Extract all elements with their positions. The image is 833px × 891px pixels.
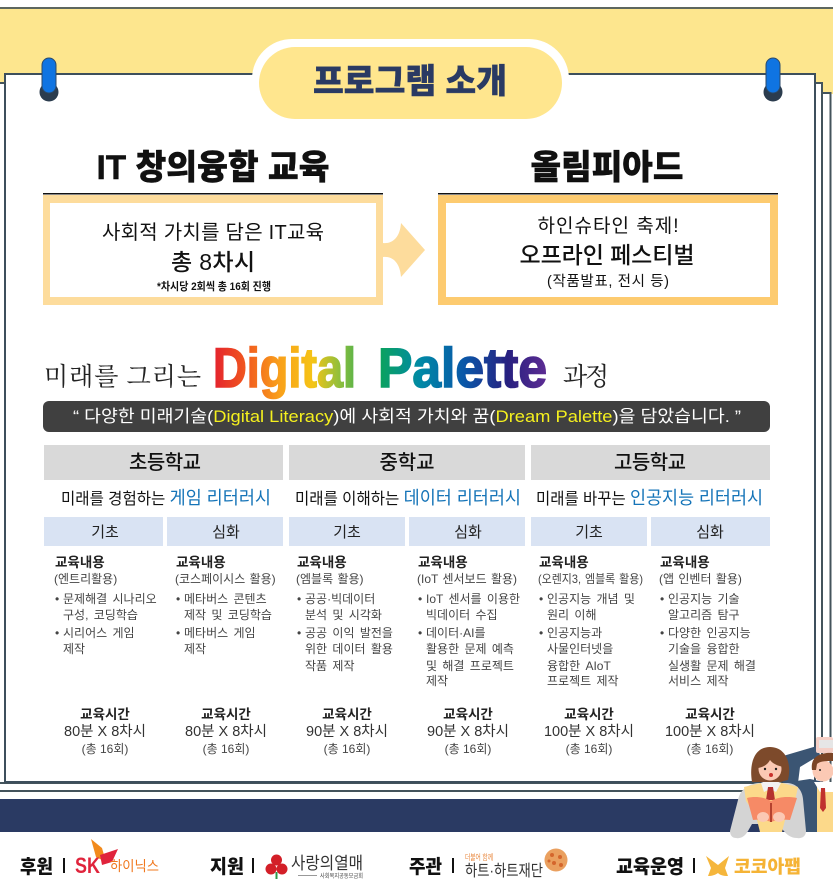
organizer: Heart-Heart Foundation: 더불어 함께 bbox=[465, 852, 493, 862]
subtitle: data literacy: 미래를 이해하는 데이터 리터러시 bbox=[295, 488, 521, 508]
heading: Digital Palette course: Digital bbox=[213, 336, 356, 399]
subtitle: game literacy: 미래를 경험하는 게임 리터러시 bbox=[61, 488, 271, 508]
column: middle advanced: IoT 센서를 이용한 bbox=[426, 592, 520, 606]
column: middle basic: 공공·빅데이터 bbox=[305, 592, 375, 606]
column: middle basic bbox=[296, 555, 393, 756]
column: middle advanced: 90분 X 8차시 bbox=[427, 723, 509, 740]
column: middle advanced: 교육내용 bbox=[418, 555, 468, 570]
title pill: 프로그램 소개 bbox=[313, 63, 507, 101]
panel: elementary school header bbox=[44, 445, 283, 480]
column: middle basic: 90분 X 8차시 bbox=[306, 723, 388, 740]
column: high basic bbox=[538, 555, 643, 756]
column: high basic: (총 16회) bbox=[566, 742, 612, 756]
panel: olympiad box: 하인슈타인 축제! bbox=[538, 215, 678, 237]
column: elementary basic: 교육내용 bbox=[55, 555, 105, 570]
column: high basic: (오렌지3, 엠블록 활용) bbox=[538, 572, 643, 586]
sponsor: SK hynix: 후원 bbox=[20, 856, 53, 878]
panel: elementary school header: 초등학교 bbox=[129, 451, 201, 474]
supporter: Community Chest: 지원 bbox=[210, 856, 244, 878]
column: high advanced: 서비스 제작 bbox=[668, 674, 729, 688]
panel: middle school header: 중학교 bbox=[380, 451, 434, 474]
column: high basic: 교육시간 bbox=[564, 707, 614, 722]
level tabs: 심화 bbox=[696, 524, 724, 541]
column: elementary advanced: 교육시간 bbox=[201, 707, 251, 722]
column: high basic: 원리 이해 bbox=[547, 608, 596, 622]
column: elementary basic: 제작 bbox=[63, 642, 85, 656]
operator: Kocoafab: 교육운영 bbox=[616, 856, 684, 878]
heading: olympiad: 올림피아드 bbox=[530, 149, 684, 187]
column: middle basic: • bbox=[297, 626, 301, 640]
column: high basic: • bbox=[539, 592, 543, 606]
column: elementary advanced: • bbox=[176, 626, 180, 640]
column: high advanced: 알고리즘 탐구 bbox=[668, 608, 740, 622]
column: elementary advanced bbox=[175, 555, 276, 756]
sponsor: SK hynix bbox=[20, 839, 159, 878]
column: high basic: 인공지능 개념 및 bbox=[547, 592, 635, 606]
column: middle basic: (엠블록 활용) bbox=[296, 572, 364, 586]
column: middle advanced: 교육시간 bbox=[443, 707, 493, 722]
slogan bar bbox=[43, 401, 770, 432]
panel: IT education box: 사회적 가치를 담은 IT교육 bbox=[102, 221, 324, 244]
column: high advanced bbox=[659, 555, 756, 756]
icon: students illustration bbox=[730, 737, 833, 838]
organizer: Heart-Heart Foundation bbox=[409, 848, 568, 880]
column: high advanced: • bbox=[660, 626, 664, 640]
column: middle basic: 위한 데이터 활용 bbox=[305, 642, 393, 656]
column: middle basic: 분석 및 시각화 bbox=[305, 608, 382, 622]
column: elementary basic: (엔트리활용) bbox=[54, 572, 117, 586]
column: elementary basic: • bbox=[55, 592, 59, 606]
panel: IT education box: *차시당 2회씩 총 16회 진행 bbox=[157, 279, 271, 293]
column: elementary advanced: 교육내용 bbox=[176, 555, 226, 570]
slogan bar: “ 다양한 미래기술( Digital Literacy )에 사회적 가치와 꿈( Dream Palette )을 담았습니다. ” bbox=[73, 407, 741, 426]
subtitle: AI literacy: 미래를 바꾸는 인공지능 리터러시 bbox=[536, 488, 763, 508]
column: high basic: 100분 X 8차시 bbox=[544, 723, 634, 740]
panel: high school header: 고등학교 bbox=[614, 451, 686, 474]
column: middle advanced: • bbox=[418, 592, 422, 606]
column: high advanced: 교육시간 bbox=[685, 707, 735, 722]
organizer: Heart-Heart Foundation: 주관 bbox=[409, 856, 442, 878]
column: high basic: 인공지능과 bbox=[547, 626, 602, 640]
column: middle advanced: (IoT 센서보드 활용) bbox=[417, 572, 517, 586]
column: middle advanced bbox=[417, 555, 520, 756]
yellow header background bbox=[0, 0, 833, 94]
column: elementary basic: 80분 X 8차시 bbox=[64, 723, 146, 740]
column: middle advanced: (총 16회) bbox=[445, 742, 491, 756]
column: middle basic: • bbox=[297, 592, 301, 606]
operator: Kocoafab: 코코아팹 bbox=[734, 857, 801, 877]
column: middle advanced: 활용한 문제 예측 bbox=[426, 642, 514, 656]
column: elementary basic: 시리어스 게임 bbox=[63, 626, 135, 640]
column: elementary advanced: • bbox=[176, 592, 180, 606]
column: high basic: 융합한 AIoT bbox=[547, 659, 611, 673]
column: high basic: 프로젝트 제작 bbox=[547, 674, 619, 688]
panel: olympiad box: 오프라인 페스티벌 bbox=[520, 242, 694, 268]
column: high advanced: • bbox=[660, 592, 664, 606]
column: elementary advanced: (코스페이시스 활용) bbox=[175, 572, 276, 586]
heading: Digital Palette course bbox=[44, 336, 609, 399]
navy footer band bbox=[0, 799, 833, 832]
panel: middle school header bbox=[289, 445, 525, 480]
column: high advanced: 다양한 인공지능 bbox=[668, 626, 751, 640]
column: elementary advanced: (총 16회) bbox=[203, 742, 249, 756]
level tabs: 심화 bbox=[212, 524, 240, 541]
column: high advanced: 기술을 융합한 bbox=[668, 642, 740, 656]
column: high advanced: 실생활 문제 해결 bbox=[668, 659, 756, 673]
title pill bbox=[252, 39, 569, 119]
column: elementary basic: 구성, 코딩학습 bbox=[63, 608, 138, 622]
panel: IT education box: 총 8차시 bbox=[171, 249, 255, 275]
level tabs: 기초 bbox=[333, 524, 361, 541]
sponsor: SK hynix: 하이닉스 bbox=[110, 858, 159, 874]
panel: IT education box bbox=[43, 195, 383, 305]
operator: Kocoafab bbox=[616, 856, 801, 878]
heading: Digital Palette course: 과정 bbox=[563, 363, 609, 391]
panel: olympiad box bbox=[438, 195, 778, 305]
column: middle advanced: 제작 bbox=[426, 674, 448, 688]
column: high advanced: 인공지능 기술 bbox=[668, 592, 740, 606]
column: high advanced: 교육내용 bbox=[660, 555, 710, 570]
heading: Digital Palette course: Palette bbox=[378, 336, 547, 399]
column: high basic: 교육내용 bbox=[539, 555, 589, 570]
column: middle basic: 교육시간 bbox=[322, 707, 372, 722]
column: middle advanced: 및 해결 프로젝트 bbox=[426, 659, 514, 673]
heading: Digital Palette course: 미래를 그리는 bbox=[44, 363, 201, 391]
column: high advanced: 100분 X 8차시 bbox=[665, 723, 755, 740]
column: high basic: • bbox=[539, 626, 543, 640]
column: elementary advanced: 제작 및 코딩학습 bbox=[184, 608, 272, 622]
right binder pin bbox=[764, 58, 782, 102]
level tabs: 기초 bbox=[91, 524, 119, 541]
column: elementary basic: 교육시간 bbox=[80, 707, 130, 722]
supporter: Community Chest bbox=[210, 854, 363, 880]
column: middle basic: (총 16회) bbox=[324, 742, 370, 756]
panel: olympiad box: (작품발표, 전시 등) bbox=[547, 273, 669, 290]
column: elementary basic bbox=[54, 555, 157, 756]
column: elementary basic: 문제해결 시나리오 bbox=[63, 592, 157, 606]
column: middle basic: 공공 이익 발전을 bbox=[305, 626, 393, 640]
supporter: Community Chest: 사회복지공동모금회 bbox=[320, 872, 363, 880]
column: elementary basic: (총 16회) bbox=[82, 742, 128, 756]
level tabs: 기초 bbox=[575, 524, 603, 541]
heading: IT education: IT 창의융합 교육 bbox=[96, 149, 330, 187]
column: elementary advanced: 제작 bbox=[184, 642, 206, 656]
column: high advanced: (총 16회) bbox=[687, 742, 733, 756]
organizer: Heart-Heart Foundation: 하트·하트재단 bbox=[465, 862, 543, 880]
panel: high school header bbox=[531, 445, 770, 480]
column: high basic: 사물인터넷을 bbox=[547, 642, 613, 656]
column: middle basic: 작품 제작 bbox=[305, 659, 354, 673]
supporter: Community Chest: 사랑의열매 bbox=[291, 854, 363, 873]
column: elementary advanced: 메타버스 콘텐츠 bbox=[184, 592, 267, 606]
column: elementary basic: • bbox=[55, 626, 59, 640]
column: high advanced: (앱 인벤터 활용) bbox=[659, 572, 742, 586]
column: middle basic: 교육내용 bbox=[297, 555, 347, 570]
column: middle advanced: • bbox=[418, 626, 422, 640]
column: middle advanced: 빅데이터 수집 bbox=[426, 608, 498, 622]
column: middle advanced: 데이터·AI를 bbox=[426, 626, 486, 640]
sponsor: SK hynix: SK bbox=[75, 853, 100, 878]
column: elementary advanced: 메타버스 게임 bbox=[184, 626, 256, 640]
arrow: puzzle connector bbox=[383, 223, 425, 277]
level tabs: 심화 bbox=[454, 524, 482, 541]
left binder pin bbox=[40, 58, 58, 102]
column: elementary advanced: 80분 X 8차시 bbox=[185, 723, 267, 740]
level tabs bbox=[44, 517, 770, 546]
